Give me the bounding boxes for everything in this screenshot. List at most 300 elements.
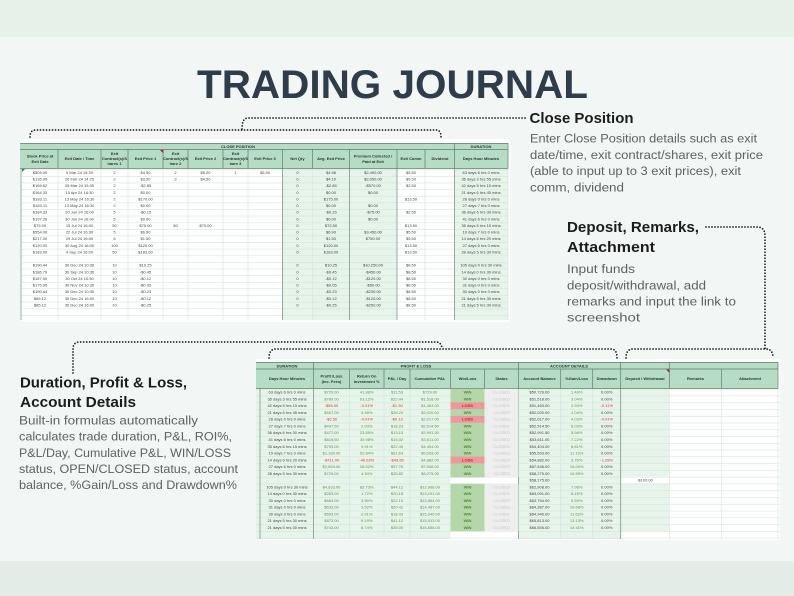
column: days hour minutes: 14 days 6 hrs 20 mins [267,457,307,462]
column: cumulative profit and loss: $15,040.00 [420,512,441,516]
column: exit price 2: $70.00 [199,223,212,228]
column: exit price 1: -$0.15 [140,210,152,215]
column: win or loss: WIN [464,444,471,449]
column: exit price 2: $4.50 [200,177,211,182]
column: days hour minutes: 30 days 0 hrs 0 mins [269,512,305,516]
column: percent gain or loss: 2.93% [571,403,583,408]
column: profit and loss per day: $61.63 [391,450,404,456]
column: return on investment: 41.88% [360,390,374,395]
column: win or loss: LOSS [462,417,473,422]
table header: close position: Exit [111,151,119,156]
column: status: CLOSED [493,464,510,469]
column: net quantity: 0 [296,210,299,215]
column: profit and loss per day: $20.18 [391,491,404,496]
column: exit contracts 3: 1 [234,170,237,175]
column: profit and loss per day: $22.49 [391,444,404,449]
column: days hour minutes: 63 days 6 hrs 0 mins [463,170,499,175]
column: stock price at exit date: $85.12 [34,296,47,301]
column: net quantity: 0 [296,230,299,235]
column: drawdown: 0.00% [601,437,613,442]
description: close position: Enter Close Position details such as exit [530,132,758,146]
column: percent gain or loss: 15.09% [570,464,584,469]
column: exit commission: $2.50 [406,210,417,215]
column: account balance: $52,514.50 [529,424,550,428]
column: exit date and time: 30 Nov 24 10:30 [65,282,95,288]
column: exit date and time: 29 Jul 24 16:00 [66,236,94,241]
column: status: CLOSED [493,437,510,442]
table header: close position: Contract(s)/S [163,156,188,161]
column: net quantity: 0 [296,276,299,281]
column: drawdown: 0.00% [601,450,613,456]
column: profit and loss including fees: $557.00 [324,410,340,415]
column: exit contracts 1: 100 [111,243,119,248]
column: account balance: $55,593.00 [529,450,550,456]
column: exit date and time: 30 Sep 24 10:30 [65,269,95,274]
column: status: CLOSED [493,457,510,462]
column: exit commission: $8.50 [406,276,417,281]
column: win or loss: LOSS [462,457,473,462]
text block: duration, profit and loss, account details [19,374,239,492]
column: return on investment: 4.34% [361,471,373,476]
text block: close position [530,110,763,194]
column: percent gain or loss [570,390,584,530]
description: duration, profit and loss, account details [19,414,239,492]
column: exit commission: $2.50 [406,183,417,188]
column: average exit price: $6.90 [326,230,337,235]
table header: close position: Premium Collected / [354,154,393,158]
table header: profit and loss: Account Balance [523,376,557,381]
column: average exit price: $175.00 [324,196,339,202]
column: drawdown: -0.11% [601,403,613,408]
column: account balance: $63,754.00 [529,498,550,503]
table header: close position: Exit Price 3 [254,156,277,161]
table header: profit and loss: P&L / Day [388,376,407,381]
table header: close position: Exit [172,151,180,156]
table header: profit and loss: Investment % [354,379,380,384]
column: status: CLOSED [493,505,510,510]
column: exit price 1: -$0.12 [140,296,152,301]
column: exit commission: $8.50 [406,282,417,288]
column: exit price 1: $0.00 [140,216,151,221]
column: exit date and time: 13 May 24 16:30 [65,203,95,208]
column: profit and loss per day: $22.44 [391,396,404,401]
heading: duration, profit and loss, account details: Duration, Profit & Loss, [20,374,187,392]
column: account balance: $52,991.50 [529,430,550,435]
column: days hour minutes: 27 days 7 hrs 0 mins [463,203,499,208]
column: percent gain or loss: 13.13% [570,518,584,523]
column: exit commission: $8.50 [406,296,417,301]
table header: profit and loss: Status [495,376,508,381]
column: account balance: $57,546.00 [529,464,550,469]
column: exit price 1: $4.50 [140,170,151,175]
table header: close position: Dividend [432,156,449,161]
arrow: deposit, remarks, attachment connector [626,227,773,358]
column: days hour minutes: 21 days 6 hrs 45 mins [461,190,501,195]
column: exit commission: $8.50 [406,269,417,274]
description: close position: date/time, exit contract/shares, exit price [530,148,763,162]
column: premium collected or paid at exit: -$120.00 [365,276,382,281]
column: account balance: $51,463.00 [529,403,550,408]
column: cumulative profit and loss: $1,518.00 [421,396,440,401]
column: stock price at exit date [33,170,48,307]
column: win or loss: LOSS [462,403,473,408]
description: deposit, remarks, attachment: remarks and input the link to [567,294,736,308]
column: premium collected or paid at exit: -$250.00 [365,302,382,307]
column: net quantity: 0 [296,170,299,175]
column: drawdown: 0.00% [601,484,613,489]
column: exit contracts 1: 10 [112,269,117,274]
column: average exit price: $10.25 [325,263,338,268]
column: stock price at exit date: $190.44 [33,263,48,268]
column: average exit price: -$0.05 [325,282,337,288]
column: win or loss: WIN [464,518,471,523]
column: days hour minutes: 30 days 0 hrs 0 mins [269,498,305,503]
column: exit price 1: -$0.25 [140,302,152,307]
column: win or loss: WIN [464,484,471,489]
description: duration, profit and loss, account details: balance, %Gain/Loss and Drawdown% [19,478,237,492]
column: percent gain or loss: 5.03% [571,424,583,428]
column: average exit price: $120.00 [324,243,339,248]
column: exit price 2 [199,170,212,228]
column: cumulative profit and loss: $12,908.00 [420,484,441,489]
column: exit date and time: 20 Jun 24 16:00 [65,210,95,215]
column: drawdown: -0.01% [600,417,613,422]
column: net quantity: 0 [296,223,299,228]
column: days hour minutes: 63 days 6 hrs 0 mins [269,390,305,395]
column: exit price 1: $0.00 [140,190,151,195]
column: profit and loss including fees: $4,633.00 [323,484,341,489]
column: status: CLOSED [493,417,510,422]
column: exit contracts 1: 10 [112,302,117,307]
column: cumulative profit and loss: $8,275.00 [421,471,440,476]
column: exit contracts 1: 5 [113,230,116,235]
column: net quantity: 0 [296,243,299,248]
column: average exit price: $0.00 [326,216,337,221]
column: exit commission: $8.50 [406,289,417,294]
table header: close position: Exit Date / Time [65,156,95,161]
arrow: close position connector [30,118,526,137]
column: premium collected or paid at exit: $3,450.00 [364,230,383,235]
description: duration, profit and loss, account details: Built-in formulas automatically [19,414,199,428]
column: account balance: $66,556.00 [529,525,550,530]
column: exit commission: $13.50 [405,196,418,202]
table header: close position: Exit Comm [401,156,422,161]
column: exit contracts 2: 50 [173,223,178,228]
column: account balance: $54,404.00 [529,444,550,449]
column: profit and loss including fees: $873.00 [324,518,340,523]
column: profit and loss per day [390,390,405,530]
column: net quantity: 0 [296,289,299,294]
column: exit commission: $8.50 [406,263,417,268]
column: average exit price: -$0.45 [325,269,337,274]
column: exit contracts 2 [173,170,178,228]
column: profit and loss per day: -$49.85 [390,457,405,462]
column: days hour minutes: 42 days 5 hrs 15 mins [461,183,501,188]
column: win or loss: WIN [464,512,471,516]
column: days hour minutes: 30 days 0 hrs 0 mins [463,289,499,294]
description: deposit, remarks, attachment: Input funds [567,262,635,276]
column: stock price at exit date: $175.00 [33,282,48,288]
column: win or loss: WIN [464,471,471,476]
column: premium collected or paid at exit: -$450.00 [365,269,382,274]
column: profit and loss including fees: $743.00 [324,525,340,530]
column: drawdown: 0.00% [601,498,613,503]
column: exit contracts 1: 10 [112,296,117,301]
column: return on investment: 52.84% [360,450,374,456]
column: stock price at exit date: $184.33 [33,210,48,215]
column: net quantity: 0 [296,216,299,221]
column: profit and loss per day: -$1.30 [391,403,403,408]
column: net quantity: 0 [296,249,299,254]
column: percent gain or loss: 5.98% [571,430,583,435]
column: percent gain or loss: 8.81% [571,444,583,449]
column: exit date and time: 30 Dec 24 16:00 [65,296,95,301]
column: return on investment: 3.52% [361,505,373,510]
column: exit contracts 1 [111,170,119,307]
column: days hour minutes: 28 days 5 hrs 30 mins [267,471,307,476]
column: average exit price: -$2.85 [325,183,337,188]
column: exit date and time: 13 May 24 16:30 [65,196,95,202]
description: close position: comm, dividend [530,180,624,194]
column: average exit price: -$0.12 [325,276,337,281]
table header: close position: CLOSE POSITION [221,144,255,149]
column: status: CLOSED [493,518,510,523]
column: account balance: $50,729.00 [529,390,550,395]
column: net quantity: 0 [296,263,299,268]
table header: profit and loss: Cumulative P&L [415,376,446,381]
column: days hour minutes: 35 days 3 hrs 55 mins [267,396,307,401]
column: win or loss [450,389,484,531]
column: drawdown: 0.00% [601,512,613,516]
column: exit price 1: $120.00 [138,243,154,248]
column: drawdown: 0.00% [601,430,613,435]
column: net quantity: 0 [296,282,299,288]
column: status: CLOSED [493,525,510,530]
column: days hour minutes: 41 days 6 hrs 0 mins [463,216,499,221]
column: profit and loss per day: -$0.13 [391,417,403,422]
column: profit and loss per day: $44.12 [391,484,404,489]
column: premium collected or paid at exit: -$230.00 [365,289,382,294]
table header: close position: Exit Date [31,159,49,164]
column: return on investment: 30.98% [360,437,374,442]
column: profit and loss including fees: $619.50 [324,437,340,442]
column: account balance [529,390,550,530]
column: profit and loss per day: $18.23 [391,424,404,428]
column: days hour minutes: 36 days 6 hrs 30 mins [461,210,501,215]
column: return on investment: 82.73% [360,484,374,489]
column: premium collected or paid at exit: -$570.00 [365,183,382,188]
table header: close position: DURATION [471,144,492,149]
column: net quantity: 0 [296,196,299,202]
column: exit date and time: 30 Oct 24 10:30 [65,276,95,281]
column: profit and loss including fees: $663.00 [324,498,340,503]
column: profit and loss per day: $15.02 [391,437,404,442]
column: average exit price: -$0.25 [325,302,337,307]
table header: profit and loss: Attachment [739,376,762,381]
column: exit date and time: 30 Aug 24 16:00 [65,243,95,248]
column: return on investment: 3.90% [361,498,373,503]
column: premium collected or paid at exit: $0.00 [368,190,379,195]
column: days hour minutes [266,390,308,530]
column: account balance: $64,387.00 [529,505,550,510]
column: average exit price: $4.10 [326,177,337,182]
column: account balance: $53,611.00 [530,437,550,442]
column: status: CLOSED [493,484,510,489]
column: average exit price: -$0.23 [325,289,337,294]
heading: deposit, remarks, attachment: Attachment [567,239,655,256]
column: exit commission: $5.50 [406,236,417,241]
column: status [484,389,518,531]
column: premium collected or paid at exit: -$120.00 [365,296,382,301]
column: exit price 1: $10.25 [139,263,152,268]
table header: close position: Exit Price 1 [135,156,157,161]
column: premium collected or paid at exit: $0.00 [368,216,379,221]
column: drawdown: 0.00% [601,390,613,395]
table header: close position: Days Hour Minutes [463,156,500,161]
column: exit commission: $13.50 [405,223,418,228]
column: percent gain or loss: 10.68% [570,505,584,510]
column: exit price 2: $5.20 [200,170,211,175]
column: percent gain or loss: 16.55% [570,471,584,476]
table header: close position: Net Qty [290,156,305,161]
column: average exit price: -$0.15 [325,210,337,215]
column: days hour minutes: 14 days 0 hrs 30 mins [267,491,307,496]
column: status: CLOSED [493,444,510,449]
column: status: CLOSED [493,410,510,415]
column: exit contracts 1: 2 [113,177,116,182]
description: deposit, remarks, attachment [567,262,736,324]
column: return on investment: -0.01% [360,417,373,422]
column: stock price at exit date: $75.00 [34,223,47,228]
column: profit and loss per day: $22.10 [391,498,404,503]
column: average exit price: $4.98 [326,170,337,175]
column: exit date and time: 9 Mar 24 15:30 [66,170,94,175]
column: days hour minutes: 35 days 6 hrs 15 mins [461,223,501,228]
column: premium collected or paid at exit: $10,250.00 [363,263,384,268]
column: profit and loss including fees: -$55.00 [325,403,339,408]
column: exit contracts 1: 50 [112,223,117,228]
column: days hour minutes: 21 days 5 hrs 30 mins [267,525,307,530]
column: win or loss: WIN [464,390,471,395]
column: exit price 1: $170.00 [138,196,154,202]
column: cumulative profit and loss: $4,404.00 [421,444,440,449]
column: status: CLOSED [493,396,510,401]
column: return on investment: -0.31% [360,403,373,408]
column: stock price at exit date: $183.11 [33,196,48,202]
column: exit commission: $13.50 [405,249,418,254]
column: drawdown: 0.00% [601,491,613,496]
column: net quantity: 0 [296,177,299,182]
column: profit and loss including fees: $1,189.00 [323,450,341,456]
column: profit and loss including fees [323,390,341,530]
column: exit date and time: 30 Dec 24 10:30 [65,263,95,268]
column: premium collected or paid at exit: $2,050.00 [364,177,383,182]
column: cumulative profit and loss [420,390,441,530]
column: stock price at exit date: $183.00 [33,249,48,254]
description: deposit, remarks, attachment: screenshot [567,310,641,324]
column: stock price at exit date: $190.44 [33,289,48,294]
column: profit and loss per day: $18.43 [391,512,404,516]
column: days hour minutes: 19 days 7 hrs 0 mins [463,230,499,235]
column: status: CLOSED [493,471,510,476]
title: TRADING JOURNAL [197,63,588,107]
column: days hour minutes: 27 days 6 hrs 0 mins [463,243,499,248]
column: exit contracts 1: 2 [113,170,116,175]
column: exit contracts 1: 10 [112,282,117,288]
column: stock price at exit date: $186.79 [33,269,48,274]
column: percent gain or loss: 7.22% [571,437,583,442]
column: days hour minutes: 36 days 6 hrs 30 mins [267,430,307,435]
column: average exit price [324,170,339,307]
column: days hour minutes: 21 days 5 hrs 30 mins [461,296,501,301]
column: exit price 1: $6.90 [140,230,151,235]
table header: profit and loss: Days Hour Minutes [269,376,306,381]
column: percent gain or loss: 7.96% [571,484,583,489]
table header: close position: Avg. Exit Price [317,156,346,161]
column: profit and loss per day: $13.15 [391,430,404,435]
column: stock price at exit date: $167.00 [33,276,48,281]
column: average exit price: $183.00 [324,249,339,254]
column: profit and loss per day: $20.42 [391,505,404,510]
column: drawdown: 0.00% [601,464,613,469]
column: account balance: $58,275.00 [529,471,550,476]
column: cumulative profit and loss: $1,463.00 [421,403,440,408]
column: exit contracts 1: 10 [112,276,117,281]
column: days hour minutes [460,170,502,307]
column: days hour minutes: 41 days 6 hrs 0 mins [269,437,305,442]
column: days hour minutes: 14 days 6 hrs 20 mins [461,236,501,241]
column: stock price at exit date: $120.00 [33,243,48,248]
column: exit price 1: -$0.45 [140,269,152,274]
column: status: CLOSED [493,491,510,496]
column: account balance: $52,017.00 [529,417,550,422]
column: exit commission: $13.50 [405,243,418,248]
column: stock price at exit date: $183.11 [33,203,48,208]
column: exit price 1: $183.00 [138,249,154,254]
panel: profit and loss spreadsheet [256,359,780,540]
column: drawdown: 0.00% [601,444,613,449]
column: win or loss: WIN [464,505,471,510]
column: percent gain or loss: 1.46% [571,390,583,395]
column: exit date and time [65,170,95,307]
column: days hour minutes: 35 days 3 hrs 55 mins [461,177,501,182]
column: return on investment [359,390,375,530]
column: cumulative profit and loss: $16,656.00 [420,525,441,530]
column: return on investment: 28.62% [360,464,374,469]
column: account balance: $63,091.00 [529,491,550,496]
column: net quantity: 0 [296,269,299,274]
heading: duration, profit and loss, account details [20,374,187,411]
column: profit and loss including fees: $633.00 [324,505,340,510]
column: exit commission: $5.50 [406,177,417,182]
column: premium collected or paid at exit: -$50.00 [366,282,381,288]
column: win or loss: WIN [464,491,471,496]
column: status: CLOSED [493,390,510,395]
column: exit commission: $5.50 [406,170,417,175]
column: exit contracts 1: 5 [113,216,116,221]
column: return on investment: 2.91% [361,512,373,516]
column: exit commission: $5.50 [406,230,417,235]
column: drawdown: 0.00% [601,424,613,428]
column: win or loss: WIN [464,450,471,456]
panel: close position spreadsheet [20,139,510,322]
column: drawdown: 0.00% [601,410,613,415]
table header: profit and loss: Return On [357,374,377,378]
column: account balance: $54,882.00 [529,457,550,462]
column: average exit price: $72.50 [325,223,338,228]
column: return on investment: 9.19% [361,518,373,523]
table header: profit and loss: %Gain/Loss [565,376,589,381]
